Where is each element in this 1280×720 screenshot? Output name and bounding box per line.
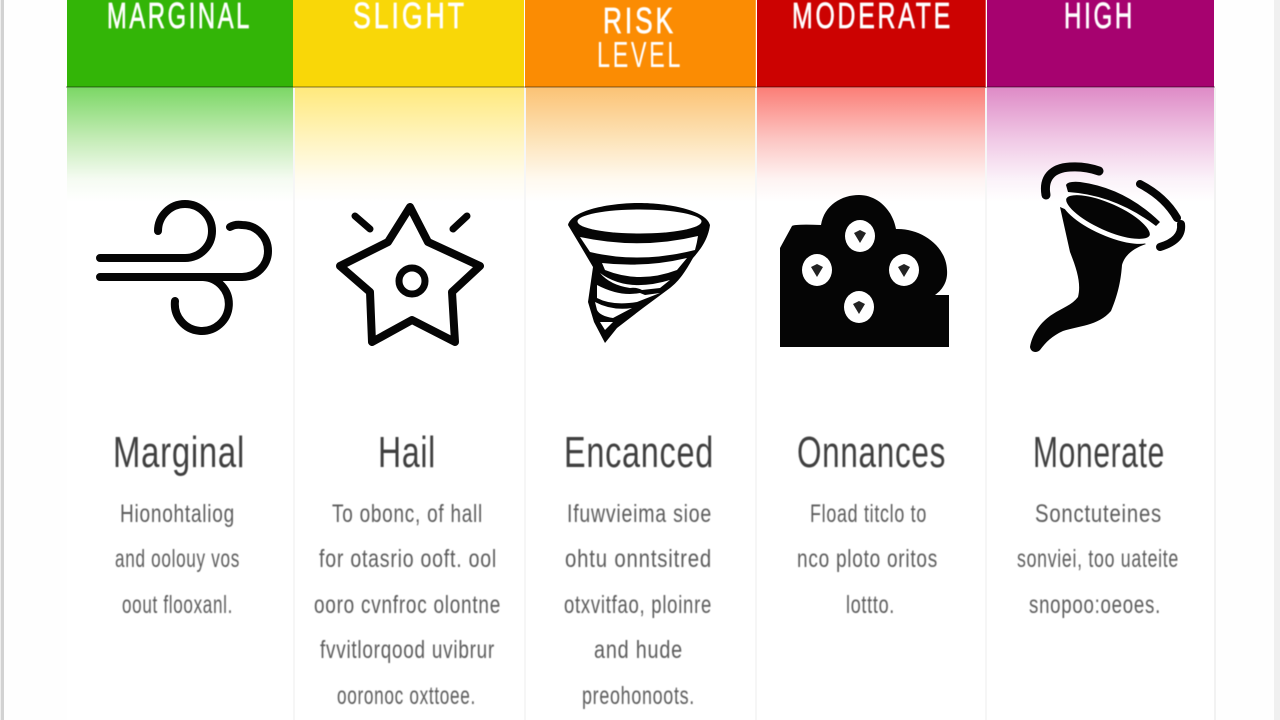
gradient band: orange bbox=[525, 87, 756, 202]
text block: hail description: ooronoc oxttoee. bbox=[337, 682, 476, 710]
gradient band: purple bbox=[987, 87, 1214, 202]
header: moderate bbox=[757, 0, 986, 87]
text block: high description bbox=[1017, 500, 1179, 619]
text block: enhanced description: preohonoots. bbox=[582, 682, 695, 710]
text block: hail description: To obonc, of hall bbox=[332, 500, 483, 528]
header: risk level bbox=[525, 0, 756, 87]
text block: moderate description: lottto. bbox=[846, 591, 895, 619]
heading: Encanced: Encanced bbox=[564, 428, 714, 477]
icon: striped tornado bbox=[568, 203, 710, 343]
gradient band: yellow bbox=[293, 87, 524, 202]
text block: marginal description: Hionohtaliog bbox=[120, 500, 235, 528]
text block: marginal description bbox=[115, 500, 240, 619]
header: slight bbox=[293, 0, 524, 87]
header: high bbox=[987, 0, 1214, 87]
text block: enhanced description: Ifuwvieima sioe bbox=[567, 500, 712, 528]
heading: Hail: Hail bbox=[378, 428, 436, 477]
text block: high description: Sonctuteines bbox=[1035, 500, 1162, 528]
icon: violent tornado bbox=[1030, 167, 1181, 352]
panel: moderate column bbox=[757, 0, 986, 619]
text block: high description: sonviei, too uateite bbox=[1017, 545, 1179, 573]
text block: enhanced description: and hude bbox=[594, 636, 683, 664]
heading: Onnances: Onnances bbox=[797, 428, 946, 477]
heading: Monerate: Monerate bbox=[1033, 428, 1165, 477]
text block: high description: snopoo:oeoes. bbox=[1029, 591, 1161, 619]
text block: enhanced description: ohtu onntsitred bbox=[565, 545, 712, 573]
header: risk level: LEVEL bbox=[597, 34, 683, 75]
text block: marginal description: and oolouy vos bbox=[115, 545, 240, 573]
gradient band: red bbox=[757, 87, 986, 202]
text block: hail description bbox=[314, 500, 501, 710]
icon: star with hailstone bbox=[340, 207, 480, 342]
header: marginal bbox=[67, 0, 293, 87]
text block: hail description: fvvitlorqood uvibrur bbox=[320, 636, 495, 664]
text block: marginal description: oout flooxanl. bbox=[122, 591, 233, 619]
icon: wind bbox=[100, 204, 268, 331]
text block: moderate description: nco ploto oritos bbox=[797, 545, 938, 573]
text block: hail description: for otasrio ooft. ool bbox=[319, 545, 497, 573]
text block: hail description: ooro cvnfroc olontne bbox=[314, 591, 501, 619]
text block: enhanced description: otxvitfao, ploinre bbox=[564, 591, 712, 619]
text block: moderate description bbox=[797, 500, 938, 619]
header: risk level: RISK bbox=[603, 0, 676, 41]
panel: high column bbox=[987, 0, 1214, 619]
text block: moderate description: Fload titclo to bbox=[810, 500, 927, 528]
gradient band: green bbox=[67, 87, 293, 202]
icon: hail cloud bbox=[780, 195, 949, 347]
panel: marginal column bbox=[67, 0, 293, 619]
heading: Marginal: Marginal bbox=[113, 428, 245, 477]
panel: slight column bbox=[293, 0, 524, 710]
panel: enhanced column bbox=[525, 0, 756, 710]
text block: enhanced description bbox=[564, 500, 712, 710]
